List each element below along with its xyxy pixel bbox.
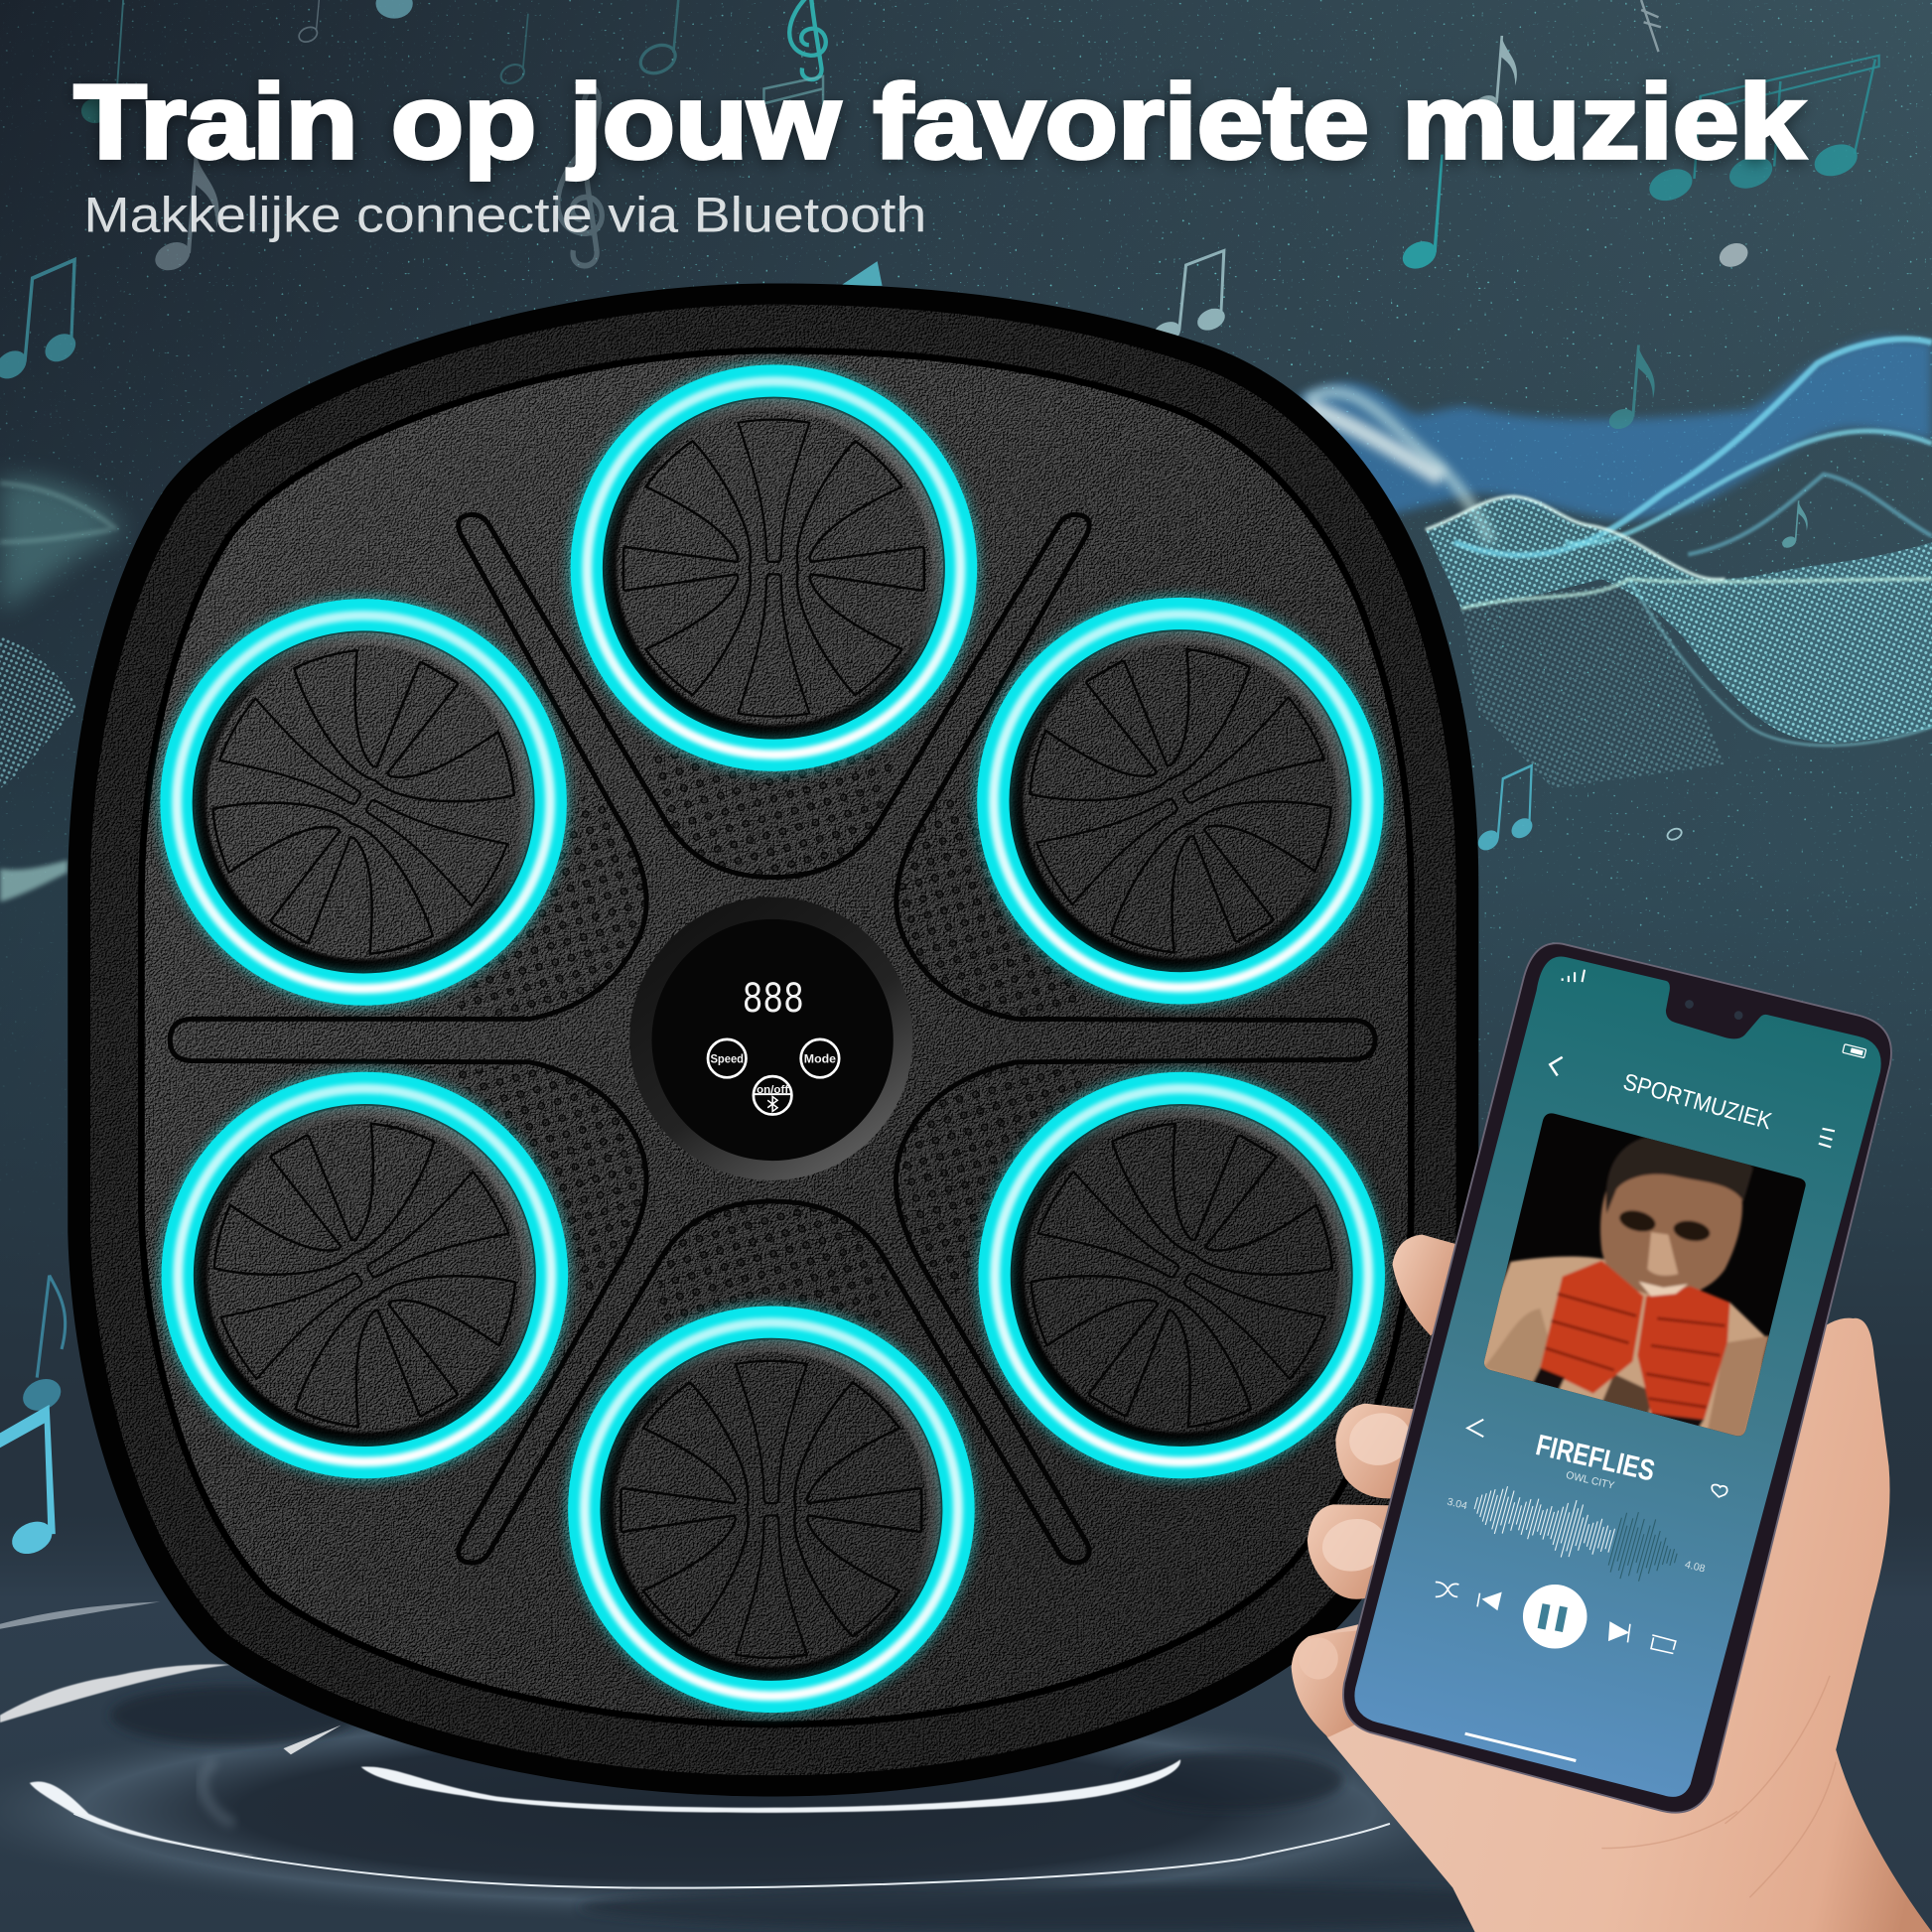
next icon — [1609, 1622, 1630, 1642]
display digits: 888 — [743, 976, 804, 1026]
particle field — [0, 0, 1932, 1355]
time start: 3.04 — [1446, 1496, 1468, 1512]
home indicator — [1465, 1733, 1576, 1760]
star shaped grooves — [170, 514, 1375, 1563]
mode button — [801, 1039, 839, 1077]
notch cameras — [1685, 1000, 1742, 1020]
on/off bluetooth button — [754, 1076, 791, 1115]
finger 2 — [1335, 1404, 1436, 1498]
menu icon — [1819, 1129, 1835, 1147]
album photo — [1483, 1113, 1806, 1436]
board outer shell — [68, 283, 1478, 1796]
battery icon — [1843, 1044, 1866, 1058]
control panel — [629, 897, 913, 1180]
target pad: upper right — [977, 597, 1384, 1006]
title: Train op jouw favoriete muziek — [73, 65, 1806, 181]
board face — [111, 333, 1442, 1749]
on/off bluetooth button: on/off — [757, 1084, 789, 1096]
finger 4 — [1292, 1629, 1374, 1737]
sound waves left — [0, 478, 126, 901]
water ripples — [0, 1516, 1932, 1932]
time end: 4.08 — [1684, 1559, 1707, 1576]
app title: SPORTMUZIEK — [1620, 1068, 1775, 1134]
phone — [1343, 943, 1891, 1813]
music notes — [0, 0, 1879, 1560]
target pad: lower right — [978, 1071, 1385, 1479]
product: boxing wall target — [50, 271, 1503, 1811]
palm and thumb — [1294, 1318, 1932, 1932]
subtitle: Makkelijke connectie via Bluetooth — [83, 187, 926, 242]
artist: OWL CITY — [1565, 1469, 1615, 1492]
target pad: lower left — [161, 1071, 569, 1479]
repeat icon — [1651, 1635, 1676, 1654]
sound waves right — [1298, 338, 1932, 788]
speaker grilles — [456, 755, 1090, 1328]
previous icon — [1477, 1593, 1501, 1609]
mode button: Mode — [804, 1052, 837, 1065]
target pad: top — [586, 379, 962, 757]
target pad: upper left — [160, 598, 567, 1007]
phone screen — [1354, 956, 1881, 1797]
shuffle icon — [1436, 1583, 1458, 1596]
target pad: bottom — [583, 1320, 960, 1698]
song title: FIREFLIES — [1533, 1429, 1658, 1488]
signal icon — [1563, 970, 1585, 982]
hand — [1292, 1235, 1932, 1932]
speed button: Speed — [710, 1052, 744, 1065]
finger 1 — [1392, 1235, 1466, 1335]
pause button — [1523, 1585, 1587, 1649]
finger 3 — [1308, 1504, 1411, 1599]
waveform — [1467, 1470, 1685, 1591]
heart icon — [1712, 1484, 1727, 1497]
share icon — [1467, 1420, 1483, 1437]
board rim — [90, 304, 1455, 1775]
phone body — [1343, 943, 1891, 1813]
back arrow — [1550, 1057, 1563, 1075]
speed button — [708, 1039, 746, 1077]
